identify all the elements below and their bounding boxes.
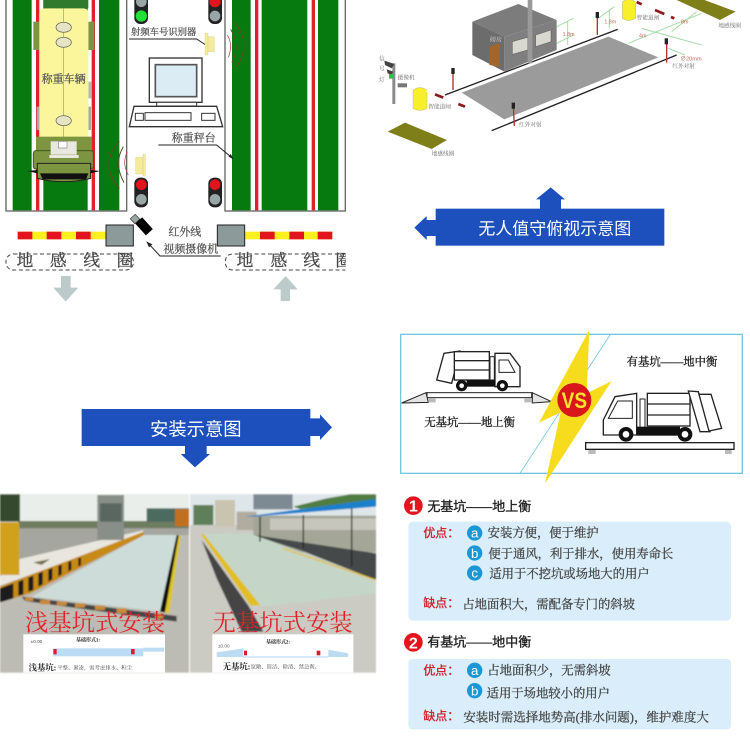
infrared beam posts: [451, 12, 668, 126]
scale platform label: [158, 130, 234, 159]
small labels: 灯: [379, 75, 385, 83]
ground loop left: 圈: [117, 251, 133, 270]
inset: foundation form 2: ±0.00: [218, 643, 230, 648]
heading 1: no pit: [404, 496, 531, 516]
heading 1: no pit: 1: [409, 499, 418, 516]
panel: installation photos: [0, 494, 376, 673]
ground loop left: 地: [17, 251, 34, 270]
banner: installation diagram title: 安装示意图: [150, 418, 242, 439]
camera label: 红外线: [168, 224, 201, 238]
inset: foundation form 1: [23, 634, 165, 673]
comparison frame: [401, 334, 742, 473]
ground loop left: [6, 251, 135, 270]
photo: no pit: [190, 494, 376, 673]
small labels: 智能道闸: [428, 103, 451, 111]
panel: pit vs no-pit comparison: [401, 330, 742, 484]
item b: [467, 683, 610, 700]
item b: b: [471, 546, 478, 561]
RFID reader upper with label: [129, 22, 244, 68]
heading 2: with pit: 有基坑——地中衡: [427, 634, 531, 649]
cons: 占地面积大，需配备专门的斜坡: [462, 596, 636, 611]
small labels: 1.8m: [604, 19, 617, 25]
small labels: ∅20mm: [680, 56, 702, 63]
inset: foundation form 2: 宽敞、简洁、除渣、禁急刹。: [251, 663, 320, 671]
ground loop pads: [388, 0, 736, 149]
small labels: 号: [379, 65, 385, 73]
card 2: [408, 659, 731, 729]
photo caption: shallow pit: 浅基坑式安装: [25, 609, 165, 636]
barrier gate right: [622, 0, 674, 20]
inset: foundation form 2: [212, 634, 353, 673]
heading 2: with pit: [404, 633, 531, 652]
signal light pole: [384, 61, 407, 104]
cons: 安装时需选择地势高(排水问题)，维护难度大: [463, 710, 709, 725]
item a: 安装方便，便于维护: [488, 525, 599, 540]
panel: unattended overhead diagram: [379, 0, 741, 246]
control booth: [472, 0, 557, 72]
panel: weighbridge layout plan: [6, 0, 366, 302]
item b: b: [471, 684, 478, 699]
VS badge: [557, 383, 591, 417]
pros label: 优点：: [423, 663, 459, 677]
small labels: 红外对射: [519, 121, 542, 129]
heading 2: with pit: 2: [409, 635, 418, 652]
small labels: 磅房: [490, 35, 502, 43]
small labels: 智能道闸: [637, 13, 660, 21]
ground loop right: 线: [303, 251, 320, 270]
small labels: [379, 13, 741, 157]
small labels: 红外对射: [672, 62, 695, 70]
inset: foundation form 2: 基础形式2:: [266, 638, 290, 645]
camera label: [146, 224, 221, 256]
banner: installation diagram title: [82, 409, 332, 467]
top traffic lights: [134, 0, 222, 24]
inset: foundation form 1: 基础形式1:: [76, 637, 100, 644]
photo: shallow pit: [0, 494, 189, 673]
camera label: 视频摄像机: [163, 241, 218, 255]
RFID reader upper with label: 射频车号识别器: [131, 26, 197, 38]
left barrier gate: [18, 225, 133, 246]
ground loop left: 感: [50, 251, 67, 270]
truck on pit scale: [586, 391, 734, 454]
ground loop right: 地: [237, 251, 254, 270]
VS badge: VS: [562, 388, 587, 413]
item b: 便于通风，利于排水，使用寿命长: [488, 546, 673, 561]
left weighing platform road: [6, 0, 127, 211]
diagonal divider: [520, 335, 610, 473]
small labels: 8m: [681, 19, 689, 25]
item c: 适用于不挖坑或场地大的用户: [489, 566, 650, 581]
card 1: [408, 522, 731, 621]
ground loop left: 线: [83, 251, 100, 270]
truck on above-ground scale: [402, 351, 552, 403]
right barrier gate: [217, 225, 332, 246]
ground loop right: [225, 250, 366, 273]
ground loop right: 感: [271, 251, 288, 270]
vehicle label: 称重车辆: [42, 72, 86, 86]
small labels: 地感线圈: [432, 149, 455, 157]
pros label: 优点：: [423, 526, 459, 540]
inset: foundation form 2: 无基坑:: [223, 661, 251, 671]
small labels: 地感线圈: [718, 21, 741, 29]
inset: foundation form 1: ±0.00: [31, 639, 43, 644]
item a: a: [471, 663, 479, 678]
small labels: 4m: [639, 34, 647, 40]
RFID reader lower: [109, 142, 145, 188]
inset: foundation form 1: 浅基坑:: [29, 662, 57, 672]
cons: [423, 595, 636, 611]
small labels: 摄像机: [398, 73, 415, 81]
label: with pit: 有基坑——地中衡: [627, 355, 718, 369]
small labels: 信: [379, 55, 385, 63]
banner: overhead view title: 无人值守俯视示意图: [478, 219, 631, 238]
infrared video camera: [130, 214, 153, 235]
arrow: entry up: [273, 276, 298, 301]
banner: overhead view title: [414, 187, 664, 246]
weighbridge platform: [462, 37, 658, 119]
photo caption: no pit: 无基坑式安装: [213, 609, 353, 636]
label: no pit: 无基坑——地上衡: [424, 415, 516, 429]
dimension lines: [557, 7, 702, 55]
computer workstation: [129, 58, 223, 127]
item a: 占地面积少，无需斜坡: [487, 662, 611, 677]
lightning bolt: [539, 330, 612, 484]
panel: pros and cons list: [404, 496, 731, 729]
right weighing platform road: [225, 0, 345, 211]
item a: a: [471, 526, 479, 541]
cons: 缺点：: [423, 595, 459, 610]
cons: 缺点：: [423, 708, 459, 723]
inset: foundation form 1: 平整、紧凑，需考虑排水、积尘: [57, 664, 133, 672]
item c: c: [471, 565, 478, 580]
heading 1: no pit: 无基坑——地上衡: [427, 499, 531, 514]
vehicle on scale: [27, 0, 100, 182]
scale platform label: 称重秤台: [172, 130, 216, 144]
barrier gate left: [413, 87, 465, 110]
arrow: exit down: [53, 276, 78, 302]
small labels: 1.8m: [563, 32, 575, 38]
ground loop right: 圈: [335, 251, 352, 270]
item b: 适用于场地较小的用户: [487, 685, 610, 700]
kerb lines: [445, 29, 677, 131]
bottom traffic lights: [134, 178, 222, 207]
